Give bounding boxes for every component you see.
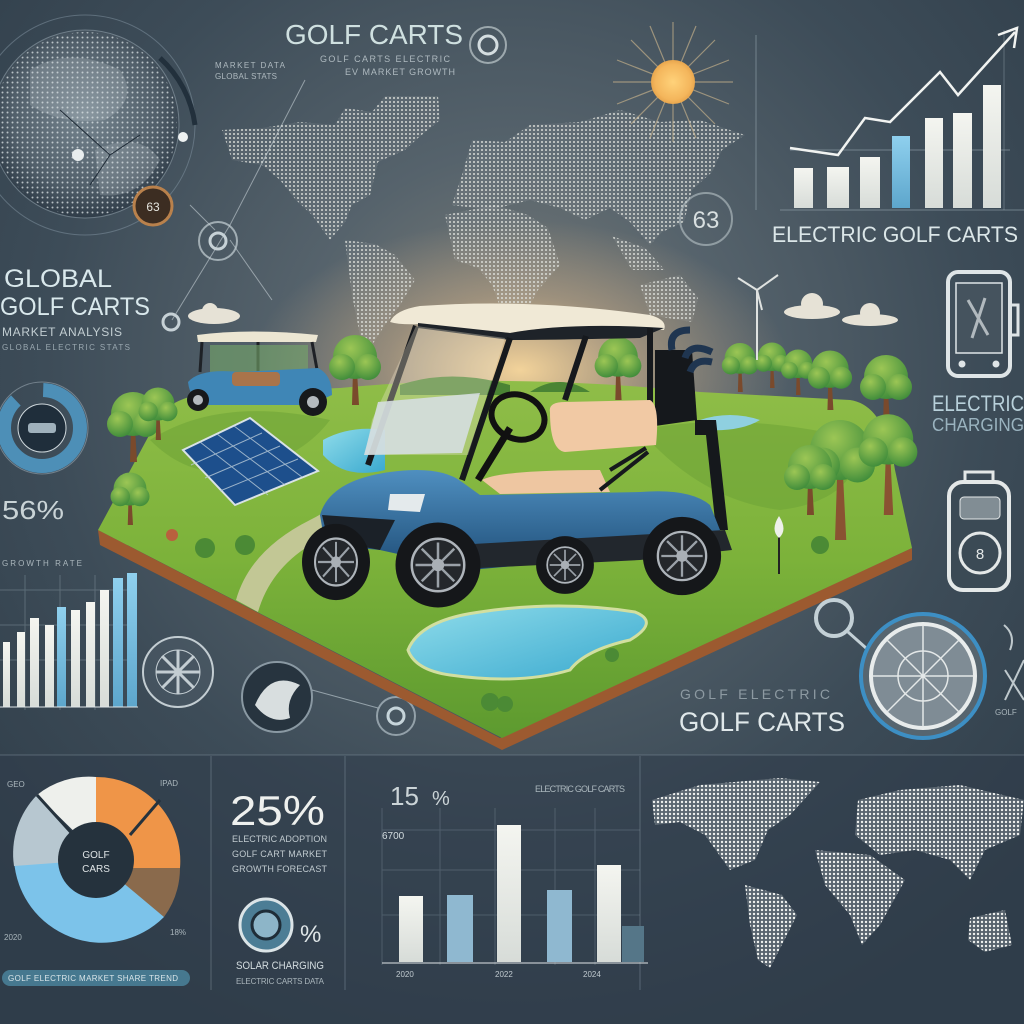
stat: 25% xyxy=(230,787,328,874)
icon: magnifier xyxy=(816,600,866,648)
sun xyxy=(613,22,733,142)
pie chart: GOLF xyxy=(82,850,110,861)
steering wheel xyxy=(485,387,551,447)
horizon glow xyxy=(250,220,790,520)
bar chart: bottom centre: 6700 xyxy=(382,831,405,842)
gauge: right xyxy=(861,614,985,738)
bar chart: bottom centre xyxy=(382,781,648,979)
bar chart: bottom centre: % xyxy=(432,788,450,810)
small golf cart xyxy=(187,332,332,416)
flag pin xyxy=(774,516,784,574)
bar chart: left xyxy=(0,559,138,710)
icon: dark lens xyxy=(242,662,312,732)
main golf cart xyxy=(302,303,732,608)
solar panel xyxy=(183,418,318,505)
badge: 63: 63 xyxy=(693,207,719,234)
heading: top GOLF CARTS: EV MARKET GROWTH xyxy=(345,67,455,77)
bar chart: bottom centre: ELECTRIC GOLF CARTS xyxy=(535,784,625,794)
badge: 63 xyxy=(680,193,732,245)
icon: charger device: 8 xyxy=(976,546,984,563)
globe xyxy=(0,15,195,235)
globe: 63 xyxy=(146,200,160,214)
wheels xyxy=(302,524,370,600)
small label near globe: MARKET DATA xyxy=(215,61,286,70)
icon: right edge glyph: GOLF xyxy=(995,708,1017,717)
heading: top GOLF CARTS: GOLF CARTS xyxy=(285,19,463,50)
golf bag xyxy=(655,330,728,530)
pie chart: CARS xyxy=(82,864,110,875)
connector nodes and lines xyxy=(163,80,305,330)
pie chart xyxy=(4,777,186,943)
bar chart: left: GROWTH RATE xyxy=(2,559,82,568)
stat: 25%: GROWTH FORECAST xyxy=(232,864,328,874)
stat: 25%: GOLF CART MARKET xyxy=(232,849,328,859)
heading: global golf carts: GOLF CARTS xyxy=(0,293,150,321)
trees xyxy=(107,335,917,540)
stat: solar ring: % xyxy=(300,921,321,948)
clouds xyxy=(188,293,898,326)
heading: golf carts lower xyxy=(679,686,845,737)
bar chart: bottom centre: 2020 xyxy=(396,970,414,979)
icon: fan dial xyxy=(143,637,213,707)
pie chart: IPAD xyxy=(160,779,178,788)
pie chart: 18% xyxy=(170,928,186,937)
icon: top target badge xyxy=(470,27,506,63)
panel: bottom stats strip xyxy=(0,755,1024,1024)
world map: top centre xyxy=(222,96,745,345)
icon: charger device xyxy=(949,472,1009,590)
wind turbine xyxy=(738,275,778,360)
stat: solar ring: ELECTRIC CARTS DATA xyxy=(236,977,325,986)
icon: phone xyxy=(948,272,1018,376)
heading: golf carts lower: GOLF CARTS xyxy=(679,707,845,737)
heading: global golf carts: MARKET ANALYSIS xyxy=(2,325,122,339)
stat: 56%: 56% xyxy=(2,495,64,525)
stat: solar ring xyxy=(236,899,325,986)
heading: top GOLF CARTS: GOLF CARTS ELECTRIC xyxy=(320,54,450,64)
bar chart: top right xyxy=(756,28,1024,210)
icon: right edge glyph xyxy=(995,625,1024,717)
legend bar: GOLF ELECTRIC MARKET SHARE TREND xyxy=(8,974,178,983)
stat: 25%: ELECTRIC ADOPTION xyxy=(232,834,327,844)
heading: electric golf carts: ELECTRIC GOLF CARTS xyxy=(772,222,1018,247)
body xyxy=(320,470,726,570)
icon: ring node xyxy=(312,690,415,735)
small label near globe xyxy=(215,61,286,81)
golf course island xyxy=(98,376,912,750)
heading: global golf carts xyxy=(0,265,150,352)
legend bar xyxy=(2,970,190,986)
heading: golf carts lower: GOLF ELECTRIC xyxy=(680,686,830,702)
heading: electric charging xyxy=(932,391,1024,435)
seat xyxy=(550,400,657,452)
pie chart: GEO xyxy=(7,780,25,789)
bar chart: bottom centre: 15 xyxy=(390,781,419,811)
stat: 25%: 25% xyxy=(230,787,325,834)
pie chart: 2020 xyxy=(4,933,22,942)
heading: top GOLF CARTS xyxy=(285,19,463,77)
world map: bottom right xyxy=(652,778,1024,968)
bar chart: bottom centre: 2022 xyxy=(495,970,513,979)
heading: global golf carts: GLOBAL xyxy=(4,265,112,293)
gauge: left xyxy=(0,382,88,474)
bar chart: bottom centre: 2024 xyxy=(583,970,601,979)
shrubs xyxy=(166,529,829,712)
heading: global golf carts: GLOBAL ELECTRIC STATS xyxy=(2,343,130,352)
stat: solar ring: SOLAR CHARGING xyxy=(236,960,324,972)
small label near globe: GLOBAL STATS xyxy=(215,72,277,81)
